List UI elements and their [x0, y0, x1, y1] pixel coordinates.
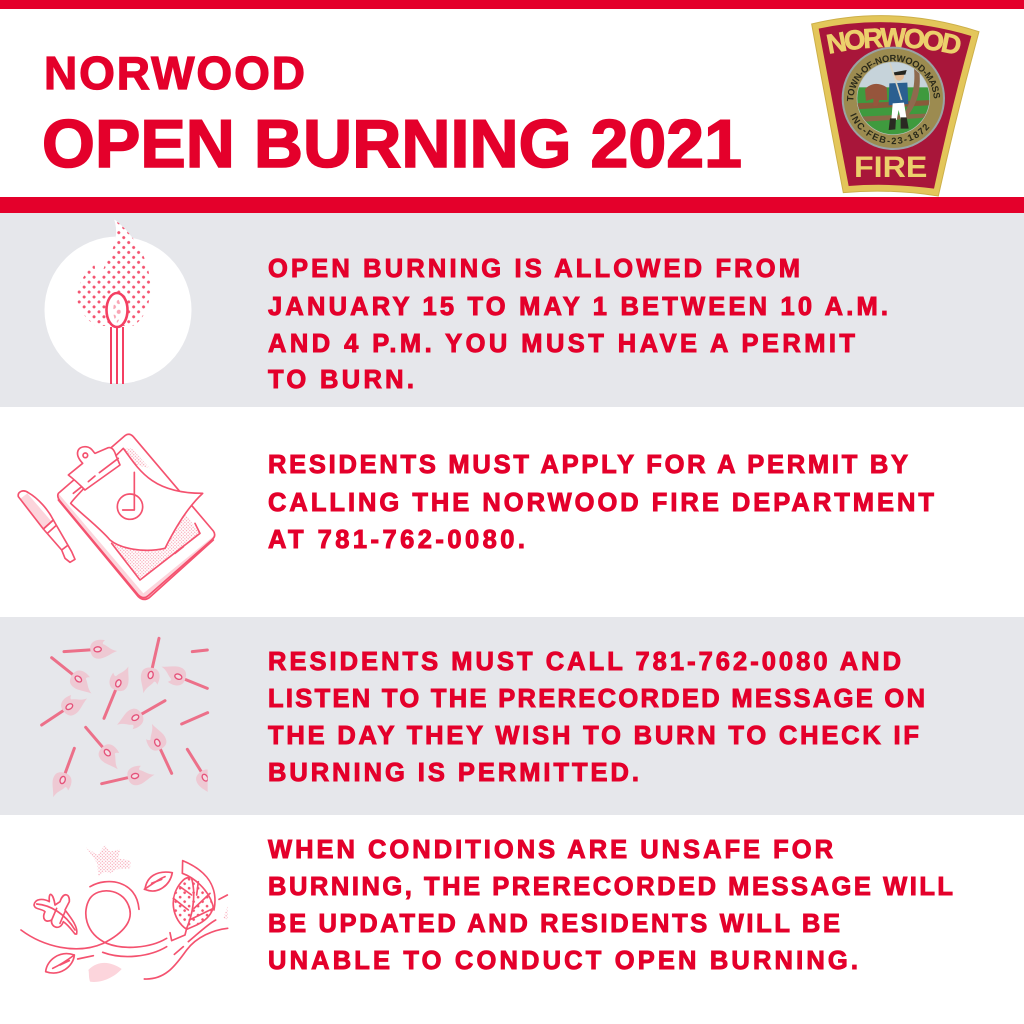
text: apply for a permit: CALLING THE NORWOOD FIRE DEPARTMENT — [268, 489, 934, 517]
text: unsafe conditions: BURNING, THE PRERECORDED MESSAGE WILL — [268, 873, 953, 901]
text: call prerecorded message: RESIDENTS MUST CALL 781-762-0080 AND — [268, 648, 901, 676]
text: call prerecorded message — [268, 648, 925, 787]
text: apply for a permit: RESIDENTS MUST APPLY FOR A PERMIT BY — [268, 451, 908, 479]
badge: Norwood Fire patch: FIRE — [854, 151, 927, 184]
text: call prerecorded message: LISTEN TO THE PRERECORDED MESSAGE ON — [268, 685, 925, 713]
title: Open Burning 2021: OPEN BURNING 2021 — [42, 106, 742, 182]
icon: scattered matches — [42, 638, 223, 801]
text: call prerecorded message: BURNING IS PERMITTED. — [268, 759, 639, 787]
text: open burning dates: OPEN BURNING IS ALLOWED FROM — [268, 255, 800, 283]
badge: Norwood Fire patch — [811, 15, 980, 197]
icon: burning match — [44, 219, 192, 384]
badge: Norwood Fire patch: TOWN-OF-NORWOOD-MASS — [846, 54, 940, 102]
text: apply for a permit: AT 781-762-0080. — [268, 526, 525, 554]
top red bar — [0, 0, 1024, 9]
panel: apply for a permit — [0, 407, 1024, 617]
text: open burning dates: TO BURN. — [268, 366, 414, 394]
text: open burning dates — [268, 255, 888, 394]
text: call prerecorded message: THE DAY THEY WISH TO BURN TO CHECK IF — [268, 722, 919, 750]
panel: open burning dates — [0, 213, 1024, 407]
title: Norwood: NORWOOD — [44, 47, 305, 99]
panel: call prerecorded message — [0, 617, 1024, 815]
text: open burning dates: JANUARY 15 TO MAY 1 BETWEEN 10 A.M. — [268, 293, 888, 321]
panel: unsafe conditions — [0, 815, 1024, 1024]
text: unsafe conditions: WHEN CONDITIONS ARE UNSAFE FOR — [268, 836, 833, 864]
badge: Norwood Fire patch: NORWOOD — [826, 28, 961, 54]
text: unsafe conditions: BE UPDATED AND RESIDENTS WILL BE — [268, 910, 840, 938]
icon: blowing leaves — [21, 845, 228, 982]
header divider bar — [0, 197, 1024, 213]
text: unsafe conditions: UNABLE TO CONDUCT OPEN BURNING. — [268, 947, 858, 975]
icon: clipboard and pen — [18, 434, 215, 599]
badge: Norwood Fire patch: INC-FEB-23-1872 — [850, 113, 930, 144]
text: apply for a permit — [268, 451, 934, 554]
text: open burning dates: AND 4 P.M. YOU MUST HAVE A PERMIT — [268, 330, 855, 358]
text: unsafe conditions — [268, 836, 953, 975]
